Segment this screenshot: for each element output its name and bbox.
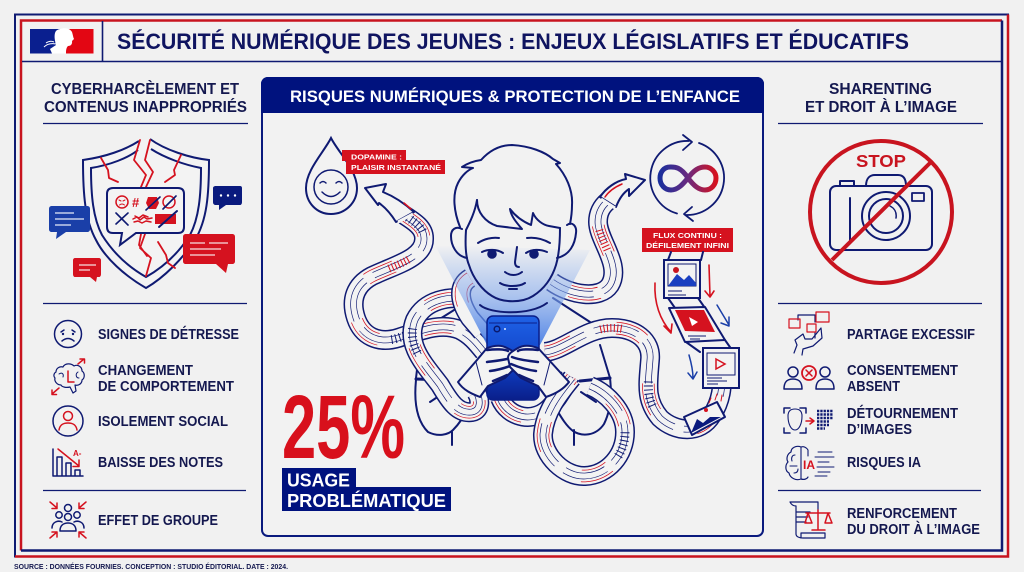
list item: consentement absent: ABSENT xyxy=(847,379,900,395)
list item: renforcement du droit à l'image xyxy=(790,502,980,538)
child body outline xyxy=(415,298,611,445)
list item: changement de comportement xyxy=(52,359,234,395)
infinite feed of media cards xyxy=(655,252,739,435)
light beam from phone xyxy=(435,245,590,345)
callout: dopamine: DOPAMINE : xyxy=(351,152,402,162)
list item: effet de groupe: EFFET DE GROUPE xyxy=(98,513,218,529)
label: usage problématique: PROBLÉMATIQUE xyxy=(287,490,446,511)
list item: détournement d'images xyxy=(784,405,958,438)
list item: signes de détresse xyxy=(54,320,239,348)
list item: détournement d'images: D’IMAGES xyxy=(847,422,912,438)
card: photo xyxy=(664,260,700,298)
callout: flux continu: DÉFILEMENT INFINI xyxy=(646,241,729,250)
header band xyxy=(22,21,1001,62)
list item: changement de comportement: DE COMPORTEMENT xyxy=(98,379,234,395)
tentacle: right main xyxy=(545,328,722,429)
list item: isolement social: ISOLEMENT SOCIAL xyxy=(98,414,228,430)
list item: effet de groupe xyxy=(50,502,218,538)
callout: flux continu: FLUX CONTINU : xyxy=(653,231,722,240)
list item: risques IA xyxy=(786,446,921,480)
heading: sharenting: SHARENTING xyxy=(829,81,932,98)
central panel header xyxy=(261,77,764,113)
tentacle: right upper xyxy=(552,201,613,294)
icon: blue chat bubble xyxy=(49,206,90,239)
callout: dopamine xyxy=(342,150,445,174)
panel: risques numériques xyxy=(261,77,764,536)
list item: risques IA: RISQUES IA xyxy=(847,455,921,471)
list item: partage excessif xyxy=(789,312,975,355)
icon: no camera stop sign: STOP xyxy=(856,151,906,171)
source footer: SOURCE : DONNÉES FOURNIES. CONCEPTION : STUDIO ÉDITORIAL. DATE : 2024. xyxy=(14,562,288,571)
statistic: 25%: 25% xyxy=(282,378,405,478)
list item: détournement d'images: DÉTOURNEMENT xyxy=(847,405,958,422)
child eyes xyxy=(487,249,539,259)
list item: renforcement du droit à l'image: DU DROIT À L’IMAGE xyxy=(847,521,980,538)
list item: baisse des notes: A- xyxy=(73,449,82,458)
list item: consentement absent: CONSENTEMENT xyxy=(847,363,958,379)
child head xyxy=(451,145,576,312)
icon: small red chat bubble xyxy=(73,258,101,282)
tentacle: lower right loop xyxy=(543,378,625,476)
right hand xyxy=(508,346,569,397)
illustration: child tangled in circuit tentacles xyxy=(354,145,722,476)
heading: cyberharcèlement xyxy=(43,81,248,124)
panel: cyberharcèlement xyxy=(43,81,248,538)
label: usage problématique xyxy=(282,468,451,511)
icon: cracked shield with speech bubbles xyxy=(49,139,242,288)
tentacle: left upper xyxy=(354,215,484,352)
tentacle: under phone xyxy=(500,376,570,417)
card: play xyxy=(703,348,739,388)
list item: baisse des notes: BAISSE DES NOTES xyxy=(98,455,223,471)
list item: risques IA: IA xyxy=(803,458,815,472)
icon: French Republic flag logo xyxy=(30,28,94,54)
tentacle: neck curl xyxy=(461,278,482,332)
heading: cyberharcèlement: CYBERHARCÈLEMENT ET xyxy=(51,81,240,98)
icon: cracked shield with speech bubbles: # xyxy=(132,195,140,210)
heading: sharenting xyxy=(778,81,983,124)
arrow head: right tentacle xyxy=(600,174,645,208)
card: video xyxy=(669,307,725,342)
icon: no camera stop sign xyxy=(810,141,952,283)
tentacle: left lower xyxy=(412,298,479,412)
list item: signes de détresse: SIGNES DE DÉTRESSE xyxy=(98,326,239,343)
card: landscape xyxy=(684,394,725,435)
panel: sharenting xyxy=(778,81,983,538)
icon: navy chat bubble xyxy=(213,186,242,210)
icon: infinite loop xyxy=(650,135,724,221)
list item: baisse des notes xyxy=(53,449,223,476)
smartphone xyxy=(487,316,539,400)
list item: partage excessif: PARTAGE EXCESSIF xyxy=(847,327,975,343)
heading: cyberharcèlement: CONTENUS INAPPROPRIÉS xyxy=(44,99,247,116)
list item: renforcement du droit à l'image: RENFORCEMENT xyxy=(847,506,957,522)
left hand xyxy=(458,346,518,397)
icon: dopamine drop xyxy=(306,138,357,214)
list item: changement de comportement: CHANGEMENT xyxy=(98,363,193,379)
scroll arrows xyxy=(655,265,729,379)
arrow head: left tentacle xyxy=(365,184,414,222)
icon: large red chat bubble xyxy=(183,234,235,273)
central panel header: RISQUES NUMÉRIQUES & PROTECTION DE L’ENFANCE xyxy=(290,87,740,106)
label: usage problématique: USAGE xyxy=(287,470,350,490)
list item: consentement absent xyxy=(784,363,958,395)
title: SÉCURITÉ NUMÉRIQUE DES JEUNES : ENJEUX LÉGISLATIFS ET ÉDUCATIFS xyxy=(117,29,909,54)
heading: sharenting: ET DROIT À L’IMAGE xyxy=(805,99,957,116)
list item: isolement social xyxy=(53,406,228,436)
callout: flux continu xyxy=(642,228,733,252)
callout: dopamine: PLAISIR INSTANTANÉ xyxy=(351,163,441,172)
